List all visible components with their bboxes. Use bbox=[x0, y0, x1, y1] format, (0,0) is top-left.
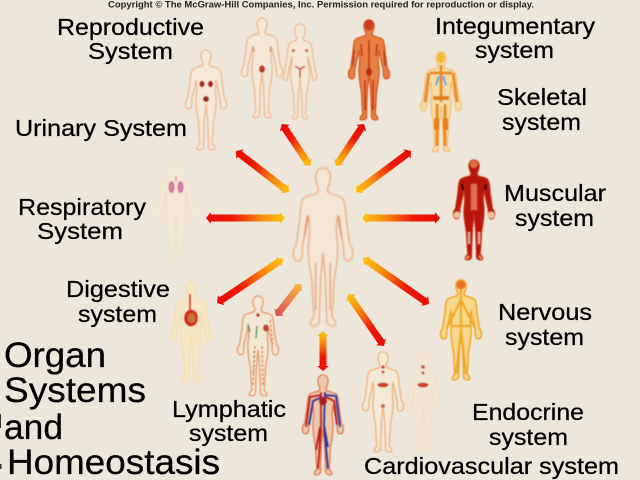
label: respiratory system bbox=[18, 194, 147, 244]
figure: digestive system bbox=[170, 282, 212, 382]
label: respiratory system: Respiratory bbox=[18, 194, 147, 220]
label: reproductive system: System bbox=[88, 38, 173, 64]
label: digestive system: Digestive bbox=[66, 276, 170, 302]
label: endocrine system: system bbox=[489, 424, 568, 450]
label: integumentary system: system bbox=[475, 37, 554, 63]
title: organ systems and homeostasis bbox=[4, 335, 220, 480]
arrow: to cardiovascular system bbox=[317, 331, 329, 371]
figure: reproductive system female bbox=[283, 24, 317, 119]
label: reproductive system: Reproductive bbox=[57, 14, 204, 40]
label: endocrine system: Endocrine bbox=[472, 399, 584, 425]
label: cardiovascular system: Cardiovascular system bbox=[364, 453, 619, 479]
figure: cardiovascular system bbox=[302, 375, 344, 475]
arrow: to muscular system bbox=[362, 212, 440, 224]
arrow: to digestive system bbox=[214, 254, 286, 308]
label: muscular system bbox=[504, 180, 606, 231]
figure: respiratory system bbox=[156, 162, 196, 262]
label: integumentary system bbox=[435, 13, 596, 63]
figure: skeletal system bbox=[420, 52, 462, 152]
label: reproductive system bbox=[57, 14, 204, 64]
figure: lymphatic system bbox=[238, 296, 278, 396]
label: muscular system: Muscular bbox=[504, 180, 606, 206]
label: digestive system bbox=[66, 276, 170, 327]
arrow: to nervous system bbox=[360, 253, 432, 309]
arrow: to skeletal system bbox=[352, 146, 415, 197]
label: nervous system: system bbox=[505, 324, 584, 350]
label: skeletal system bbox=[497, 84, 587, 135]
figure: reproductive system male bbox=[242, 18, 282, 118]
label: skeletal system: Skeletal bbox=[497, 84, 587, 110]
label: endocrine system bbox=[472, 399, 584, 450]
figure: muscular system bbox=[454, 160, 494, 260]
label: urinary system: Urinary System bbox=[15, 115, 187, 141]
title: organ systems and homeostasis: and bbox=[4, 407, 63, 447]
arrow: to urinary system bbox=[232, 146, 293, 197]
arrow: to lymphatic system bbox=[271, 280, 306, 320]
label: nervous system: Nervous bbox=[498, 299, 592, 325]
arrow: to integumentary system bbox=[331, 121, 369, 169]
label: lymphatic system: Lymphatic bbox=[172, 396, 286, 422]
figure: urinary system bbox=[186, 50, 226, 150]
figure: integumentary system bbox=[348, 20, 390, 120]
label: lymphatic system bbox=[172, 396, 286, 446]
label: muscular system: system bbox=[515, 205, 594, 231]
label: nervous system bbox=[498, 299, 592, 350]
label: skeletal system: system bbox=[502, 109, 581, 135]
figure: endocrine system female bbox=[405, 352, 441, 452]
arrow: to endocrine system bbox=[343, 291, 389, 349]
label: lymphatic system: system bbox=[189, 420, 268, 446]
figure: central human body bbox=[293, 168, 353, 326]
label: digestive system: system bbox=[78, 301, 157, 327]
arrow: to reproductive system bbox=[277, 121, 315, 169]
title: organ systems and homeostasis: Systems bbox=[4, 370, 146, 410]
label: respiratory system: System bbox=[37, 218, 123, 244]
title: organ systems and homeostasis: Organ bbox=[4, 335, 106, 375]
figure: nervous system bbox=[440, 280, 482, 380]
figure: endocrine system male bbox=[362, 352, 404, 452]
arrow: to respiratory system bbox=[206, 212, 285, 224]
label: integumentary system: Integumentary bbox=[435, 13, 596, 39]
